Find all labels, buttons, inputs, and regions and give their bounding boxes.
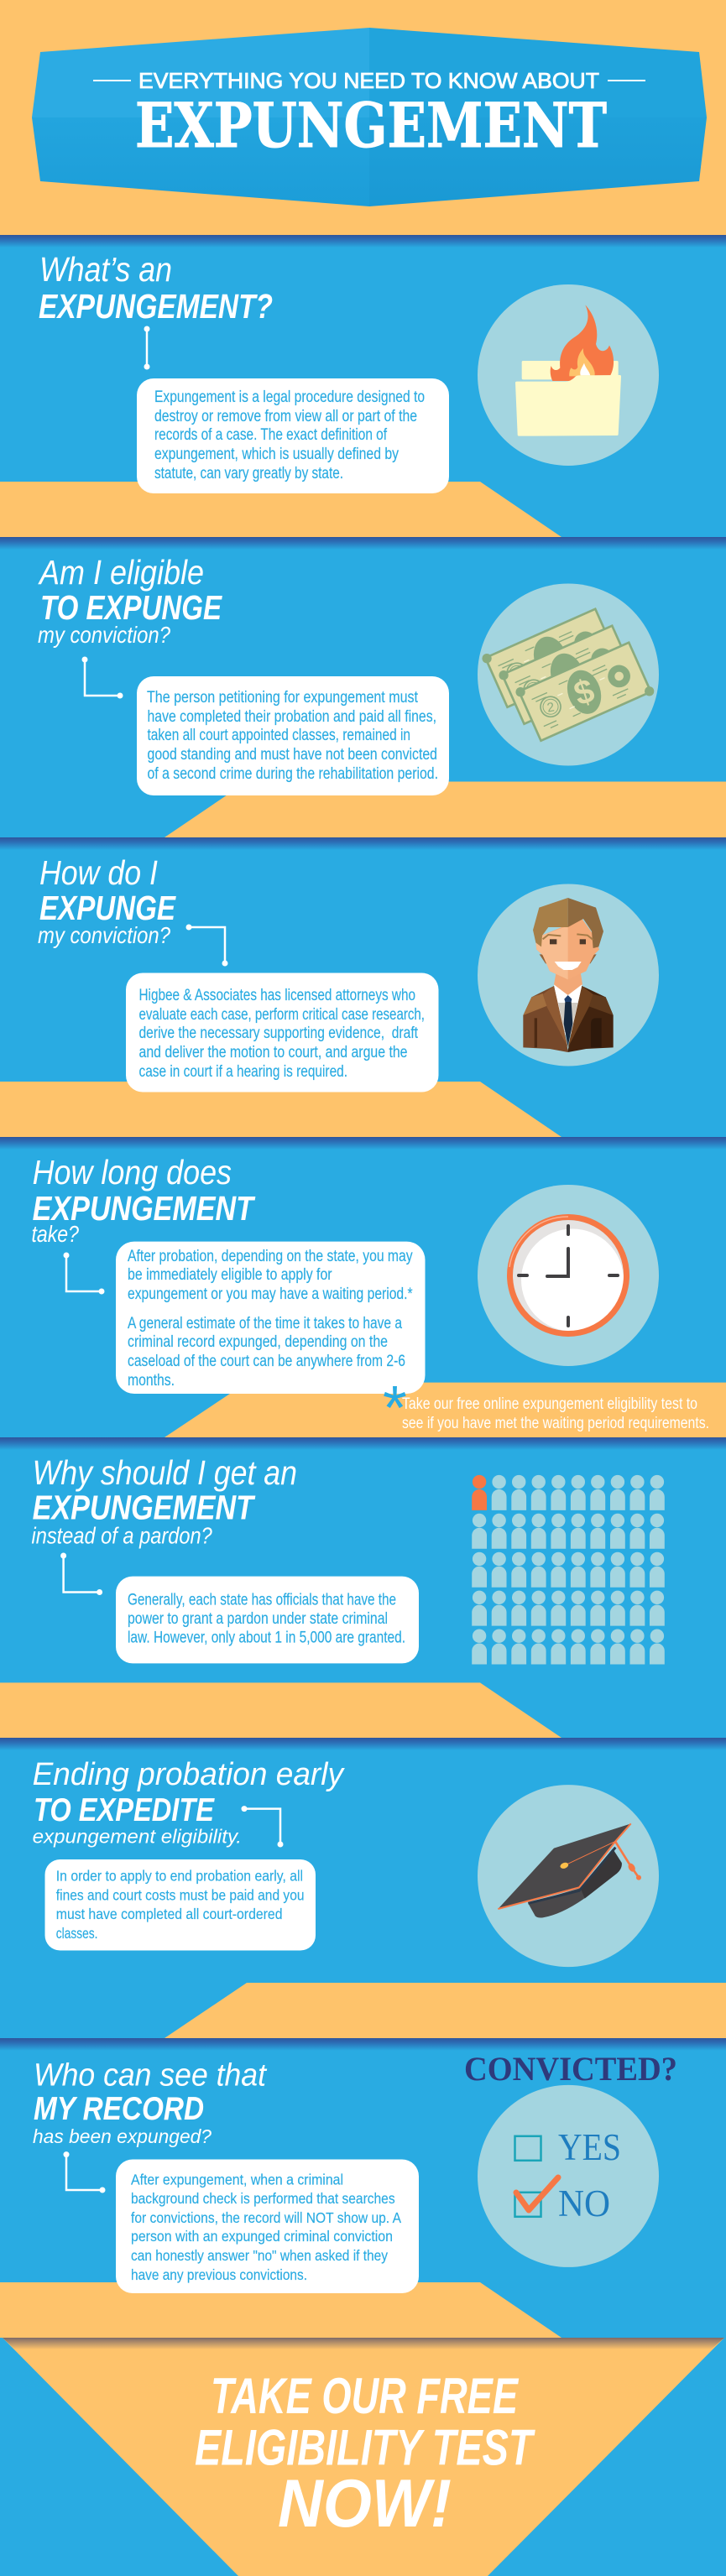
- heading: Who can see that: [34, 2057, 267, 2093]
- text box: [116, 1242, 425, 1394]
- heading: EXPUNGEMENT: [33, 1489, 255, 1527]
- text box: evaluate each case, perform critical case research,: [139, 1006, 425, 1024]
- text box: expungement or you may have a waiting period.*: [128, 1285, 413, 1303]
- panel: what's an expungement: [0, 235, 726, 537]
- heading: TO EXPEDITE: [34, 1792, 215, 1828]
- text box: law. However, only about 1 in 5,000 are granted.: [128, 1630, 405, 1647]
- text box: for convictions, the record will NOT show up. A: [131, 2209, 401, 2226]
- icon: money: [478, 584, 659, 765]
- text box: The person petitioning for expungement must: [147, 689, 419, 707]
- cta text: NOW!: [278, 2466, 452, 2542]
- connector: [60, 1552, 102, 1595]
- icon: burning folder: [478, 284, 659, 466]
- header subtitle: EVERYTHING YOU NEED TO KNOW ABOUT: [138, 68, 599, 93]
- cta text: [195, 2368, 535, 2542]
- connector: [144, 326, 149, 369]
- text box: have any previous convictions.: [131, 2266, 307, 2283]
- header title: EXPUNGEMENT: [135, 90, 607, 162]
- text box: background check is performed that searches: [131, 2190, 395, 2207]
- heading: [33, 1757, 345, 1848]
- text box: [116, 2160, 419, 2293]
- panel: how do I expunge: [0, 837, 726, 1137]
- icon: money: 2: [546, 700, 556, 716]
- heading: Am I eligible: [37, 553, 204, 592]
- heading: MY RECORD: [34, 2091, 204, 2127]
- convicted title: CONVICTED?: [464, 2050, 677, 2088]
- text box: destroy or remove from view all or part of the: [154, 408, 417, 425]
- heading: [37, 553, 222, 648]
- connector: [64, 2151, 106, 2193]
- header banner: [0, 0, 726, 235]
- text box: Expungement is a legal procedure designed to: [154, 388, 425, 406]
- panel: how long does expungement take: [0, 1137, 726, 1442]
- header rule left: [93, 80, 131, 81]
- heading: has been expunged?: [33, 2125, 212, 2147]
- text box: [137, 378, 449, 493]
- text box: classes.: [56, 1925, 97, 1942]
- icon: clock: [478, 1185, 659, 1366]
- text box: case in court if a hearing is required.: [139, 1063, 347, 1081]
- text box: After probation, depending on the state, you may: [128, 1248, 413, 1265]
- pictogram: 1 in 5,000 people: [472, 1475, 665, 1665]
- text box: good standing and must have not been convicted: [148, 746, 437, 764]
- panel: am I eligible: [0, 537, 726, 837]
- heading: EXPUNGEMENT?: [39, 287, 273, 326]
- text box: caseload of the court can be anywhere from 2-6: [128, 1353, 405, 1370]
- footnote: [383, 1373, 709, 1442]
- heading: my conviction?: [38, 622, 170, 648]
- text box: [126, 973, 438, 1092]
- heading: [32, 1153, 255, 1247]
- text box: can honestly answer "no" when asked if they: [131, 2247, 388, 2264]
- panel: ending probation early: [0, 1738, 726, 2038]
- heading: [39, 250, 273, 326]
- connector: [64, 1252, 104, 1294]
- text box: be immediately eligible to apply for: [128, 1266, 332, 1284]
- heading: take?: [32, 1221, 79, 1247]
- text box: After expungement, when a criminal: [131, 2172, 343, 2188]
- text box: have completed their probation and paid all fines,: [148, 708, 436, 726]
- connector: [82, 656, 123, 698]
- heading: Ending probation early: [33, 1757, 345, 1792]
- heading: How long does: [33, 1153, 232, 1192]
- icon: graduation cap: [478, 1785, 659, 1967]
- heading: What’s an: [39, 250, 172, 289]
- icon: attorney: [478, 884, 659, 1066]
- heading: How do I: [39, 853, 158, 892]
- cta text: ELIGIBILITY TEST: [195, 2420, 535, 2475]
- text box: Higbee & Associates has licensed attorneys who: [139, 987, 415, 1004]
- text box: A general estimate of the time it takes to have a: [128, 1315, 402, 1332]
- asterisk: *: [383, 1373, 407, 1442]
- icon: checklist: [478, 2085, 659, 2267]
- cta text: TAKE OUR FREE: [211, 2368, 519, 2424]
- text box: Generally, each state has officials that have the: [128, 1592, 396, 1609]
- heading: [33, 2057, 267, 2147]
- text box: of a second crime during the rehabilitation period.: [148, 765, 438, 783]
- heading: Why should I get an: [33, 1453, 297, 1492]
- call to action: [3, 2338, 724, 2576]
- icon: money: $: [570, 672, 598, 713]
- icon: checklist: NO: [558, 2182, 610, 2224]
- text box: [137, 676, 449, 795]
- text box: person with an expunged criminal conviction: [131, 2228, 393, 2245]
- text box: records of a case. The exact definition of: [154, 426, 388, 444]
- text box: criminal record expunged, depending on the: [128, 1333, 388, 1351]
- text box: expungement, which is usually defined by: [154, 446, 399, 463]
- text box: power to grant a pardon under state criminal: [128, 1610, 388, 1628]
- panel: who can see my record: [0, 2038, 726, 2338]
- text box: statute, can vary greatly by state.: [154, 465, 343, 482]
- heading: [38, 853, 176, 948]
- connector: [242, 1806, 284, 1848]
- connector: [186, 925, 228, 967]
- icon: checklist: YES: [558, 2126, 621, 2168]
- panel: why should I get an expungement: [0, 1437, 726, 1738]
- heading: [32, 1453, 297, 1549]
- text box: [116, 1577, 419, 1663]
- heading: EXPUNGEMENT: [33, 1189, 255, 1228]
- text box: and deliver the motion to court, and argue the: [139, 1044, 408, 1061]
- heading: expungement eligibility.: [33, 1826, 242, 1848]
- text box: In order to apply to end probation early, all: [56, 1868, 303, 1885]
- text box: [45, 1859, 316, 1950]
- heading: EXPUNGE: [39, 889, 176, 927]
- text box: derive the necessary supporting evidence, draft: [139, 1025, 419, 1042]
- text box: fines and court costs must be paid and you: [56, 1887, 305, 1904]
- heading: instead of a pardon?: [32, 1523, 212, 1549]
- text box: must have completed all court-ordered: [56, 1906, 283, 1922]
- heading: my conviction?: [38, 922, 170, 948]
- header rule right: [608, 80, 645, 81]
- heading: TO EXPUNGE: [40, 588, 222, 627]
- text box: months.: [128, 1372, 175, 1390]
- text box: taken all court appointed classes, remained in: [148, 727, 410, 744]
- footnote text: [402, 1395, 709, 1432]
